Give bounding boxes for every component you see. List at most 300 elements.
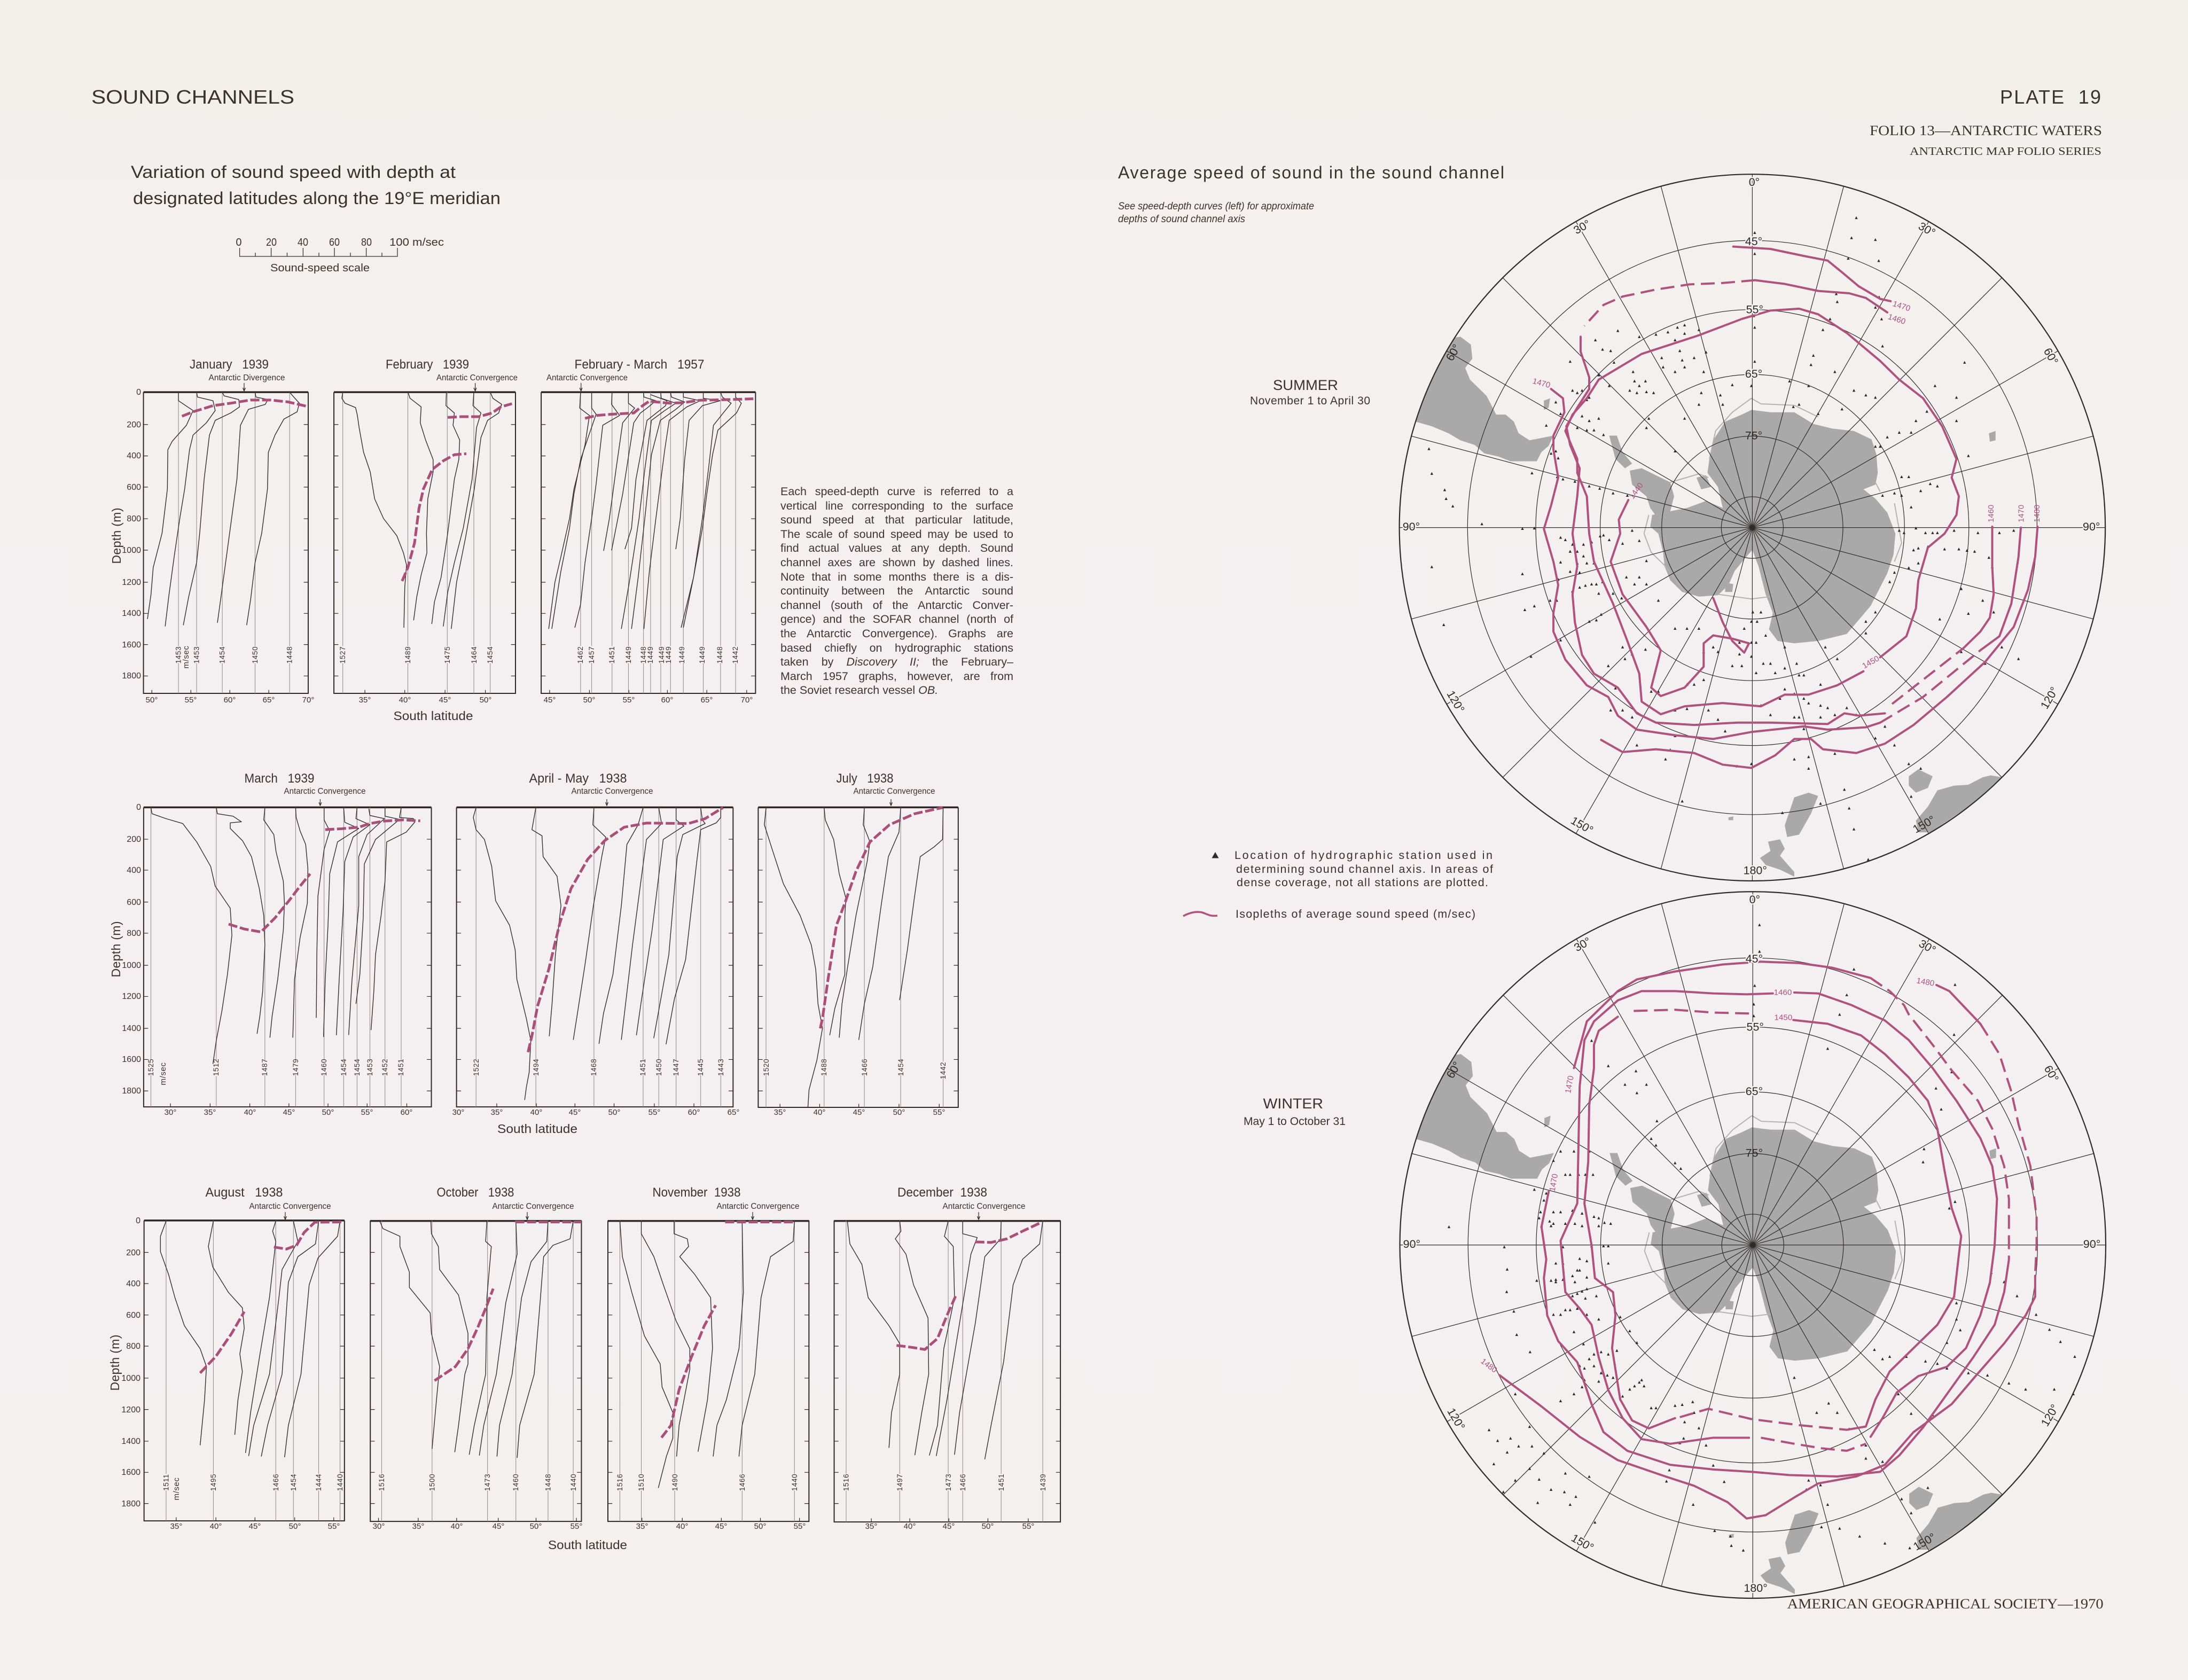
graticule labels: 30° (1917, 937, 1938, 957)
surface speed values: 1490 (671, 1474, 679, 1491)
surface speed values: 1516 (842, 1474, 850, 1491)
graticule labels: 55° (1746, 304, 1763, 316)
isopleth labels: 1440 (1627, 481, 1645, 501)
legend (1183, 849, 1493, 920)
graticule labels: 150° (1911, 814, 1937, 835)
depth axis labels, row 3: 1000 (121, 1374, 140, 1383)
depth axis labels, row 2: 1200 (122, 992, 141, 1001)
depth axis labels, row 3 (108, 1216, 140, 1509)
chart: October 1938 (370, 1185, 627, 1552)
isopleths (1499, 962, 2037, 1519)
graticule labels: 180° (1744, 865, 1767, 877)
arrow (580, 383, 582, 391)
depth axis labels, row 1: 800 (127, 514, 141, 523)
surface speed values: 1449 (665, 646, 673, 663)
surface speed values: 1454 (486, 646, 494, 663)
latitude axis labels: 40° (530, 1108, 542, 1117)
latitude axis labels: 65° (701, 696, 713, 705)
depth axis labels, row 2: 1400 (122, 1024, 141, 1033)
depth axis labels, row 3: 800 (126, 1342, 140, 1351)
latitude axis labels (373, 1522, 582, 1531)
axis title: South latitude (548, 1538, 627, 1552)
depth axis labels, row 1: 400 (127, 451, 141, 460)
left section heading (131, 162, 501, 208)
surface speed values: 1466 (861, 1059, 869, 1076)
latitude axis labels: 45° (853, 1108, 865, 1117)
surface speed values: 1445 (697, 1059, 705, 1076)
latitude axis labels: 45° (439, 696, 451, 705)
surface speed values: 1443 (717, 1059, 725, 1076)
depth axis labels, row 1: 200 (127, 420, 141, 429)
graticule labels: 65° (1746, 1085, 1763, 1098)
explanatory text block: based chiefly on hydrographic stations (780, 642, 1013, 654)
surface speed values: 1451 (397, 1059, 405, 1076)
legend: station text: Location of hydrographic station used in (1234, 849, 1492, 862)
latitude axis labels: 50° (608, 1108, 620, 1117)
graticule labels: 120° (2038, 685, 2061, 711)
graticule labels: 90° (1403, 521, 1420, 533)
surface speed values: 1473 (483, 1474, 491, 1491)
latitude axis labels: 45° (715, 1522, 727, 1531)
surface speed values: m/sec (182, 645, 191, 669)
latitude axis labels: 45° (544, 696, 556, 705)
latitude axis labels: 55° (361, 1108, 373, 1117)
depth axis labels, row 2 (109, 803, 141, 1096)
latitude axis labels: 70° (741, 696, 753, 705)
surface speed values: 1454 (897, 1059, 905, 1076)
surface speed values: 1449 (646, 646, 654, 663)
explanatory text block: channel (south of the Antarctic Conver- (780, 599, 1013, 612)
surface speed values: 1451 (997, 1474, 1005, 1491)
arrow (606, 799, 608, 806)
latitude axis labels: 55° (1022, 1522, 1034, 1531)
surface speed values: 1442 (939, 1062, 947, 1079)
legend: isopleth text: Isopleths of average sound speed (m/sec) (1236, 908, 1475, 920)
sound-speed scale: 60 (329, 237, 340, 248)
latitude axis labels (774, 1108, 945, 1117)
latitude axis labels: 35° (204, 1108, 216, 1117)
surface speed values: 1489 (404, 646, 412, 663)
series title: ANTARCTIC MAP FOLIO SERIES (1910, 145, 2101, 158)
depth axis labels, row 3: 400 (126, 1279, 140, 1288)
depth axis labels, row 2: 800 (127, 929, 141, 938)
graticule labels: 120° (1444, 1406, 1467, 1432)
legend: isopleth line (1183, 912, 1217, 916)
arrow (978, 1212, 980, 1220)
explanatory text block: continuity between the Antarctic sound (780, 584, 1013, 597)
plot (144, 1221, 345, 1521)
surface speed values: 1522 (472, 1059, 480, 1076)
explanatory text block: the Antarctic Convergence). Graphs are (780, 627, 1013, 640)
latitude axis labels (544, 696, 753, 705)
explanatory text block: the Soviet research vessel OB. (780, 684, 938, 697)
title: sound channels: SOUND CHANNELS (91, 86, 294, 108)
surface speed values: 1449 (624, 646, 632, 663)
graticule labels: 90° (2083, 1238, 2100, 1251)
note on axis depths: See speed-depth curves (left) for approximate (1118, 201, 1314, 212)
surface speed values: 1494 (532, 1059, 540, 1076)
surface speed values: 1449 (698, 646, 706, 663)
latitude axis labels: 40° (451, 1522, 463, 1531)
explanatory text block: The scale of sound speed may be used to (780, 528, 1013, 541)
chart: February-March 1957 (541, 357, 755, 705)
summer label (1250, 377, 1370, 407)
surface speed values: 1466 (959, 1474, 967, 1491)
latitude axis labels: 65° (263, 696, 275, 705)
surface speed values (472, 1059, 725, 1076)
surface speed values: 1450 (655, 1059, 663, 1076)
surface speed values: 1511 (162, 1474, 170, 1491)
legend: station text (1234, 849, 1493, 889)
surface speed values: 1440 (569, 1474, 577, 1491)
surface speed values: m/sec (159, 1062, 168, 1085)
surface speed values: 1464 (470, 646, 478, 663)
surface speed values: 1473 (944, 1474, 952, 1491)
latitude axis labels: 50° (289, 1522, 301, 1531)
graticule labels: 0° (1749, 894, 1760, 906)
chart: December 1938 (834, 1185, 1060, 1531)
graticule labels: 65° (1745, 368, 1762, 380)
graticule labels: 30° (1572, 935, 1593, 954)
latitude axis labels: 45° (493, 1522, 504, 1531)
depth axis labels, row 1: 1400 (122, 609, 141, 618)
latitude axis labels: 55° (794, 1522, 806, 1531)
surface speed values: 1442 (731, 646, 739, 663)
surface speed values: 1454 (290, 1474, 298, 1491)
graticule labels: 45° (1746, 953, 1763, 965)
station triangles (1427, 216, 2020, 861)
latitude axis labels: 50° (322, 1108, 334, 1117)
chart: February 1939 (334, 357, 518, 723)
surface speed values: 1466 (738, 1474, 746, 1491)
annotation: Antarctic Divergence: Antarctic Divergence (208, 373, 285, 382)
depth axis labels, row 2: 600 (127, 898, 141, 907)
latitude axis labels (452, 1108, 739, 1117)
chart heading: February - March 1957 (575, 357, 704, 372)
sound-speed scale: 20 (266, 237, 277, 248)
summer label: SUMMER (1273, 377, 1338, 393)
chart heading: October 1938 (437, 1185, 514, 1200)
depth axis labels, row 2: Depth (m) (109, 921, 123, 978)
folio title: FOLIO 13—ANTARCTIC WATERS (1870, 123, 2102, 138)
surface speed values: 1449 (678, 646, 686, 663)
plot (334, 392, 515, 693)
explanatory text block (780, 485, 1013, 697)
explanatory text block: March 1957 graphs, however, are from (780, 670, 1013, 683)
graticule labels: 60° (2042, 1064, 2061, 1084)
plot (608, 1221, 809, 1521)
annotation: Antarctic Convergence: Antarctic Convergence (284, 787, 365, 796)
explanatory text block: Note that in some months there is a dis- (780, 571, 1013, 583)
graticule labels: 90° (2083, 521, 2100, 533)
surface speed values (762, 1059, 947, 1079)
graticule labels: 60° (2041, 346, 2060, 367)
explanatory text block: find actual values at any depth. Sound (780, 542, 1013, 554)
arrow (751, 1212, 754, 1220)
isopleth labels: 1460 (1887, 312, 1906, 326)
latitude axis labels: 50° (893, 1108, 905, 1117)
depth axis labels, row 3: 1800 (121, 1499, 140, 1509)
annotation: Antarctic Convergence: Antarctic Convergence (436, 373, 518, 382)
explanatory text block: sound speed at that particular latitude, (780, 513, 1013, 526)
isopleth labels: 1450 (1861, 654, 1881, 670)
depth axis labels, row 3: 200 (126, 1248, 140, 1257)
surface speed values: 1451 (639, 1059, 647, 1076)
chart: November 1938 (608, 1185, 809, 1531)
map: summer (1400, 174, 2105, 881)
legend: station text: dense coverage, not all stations are plotted. (1237, 876, 1488, 889)
latitude axis labels: 50° (480, 696, 491, 705)
plot (370, 1221, 581, 1521)
depth axis labels, row 2: 200 (127, 835, 141, 844)
graticule labels: 150° (1568, 815, 1595, 837)
chart: July 1938 (758, 771, 958, 1117)
graticule labels: 0° (1749, 176, 1760, 189)
note on axis depths (1118, 201, 1314, 225)
annotation: Antarctic Convergence: Antarctic Convergence (546, 373, 628, 382)
winter label: WINTER (1263, 1096, 1323, 1112)
surface speed values (842, 1474, 1047, 1491)
latitude axis labels: 45° (283, 1108, 295, 1117)
plate number: PLATE 19 (2000, 86, 2101, 108)
surface speed values: 1468 (590, 1059, 598, 1076)
sound-speed scale (236, 237, 444, 274)
surface speed values: 1475 (443, 646, 451, 663)
latitude axis labels: 50° (146, 696, 158, 705)
surface speed values: 1453 (192, 646, 201, 663)
map: winter (1400, 892, 2106, 1598)
depth axis labels, row 3: Depth (m) (108, 1334, 122, 1391)
explanatory text block: taken by Discovery II; the February– (780, 655, 1013, 668)
annotation: Antarctic Convergence: Antarctic Convergence (942, 1202, 1026, 1211)
surface speed values: 1449 (658, 646, 666, 663)
latitude axis labels (636, 1522, 806, 1531)
latitude axis labels: 45° (249, 1522, 261, 1531)
surface speed values (616, 1474, 799, 1491)
chart heading: July 1938 (837, 771, 893, 786)
explanatory text block: Each speed-depth curve is referred to a (780, 485, 1013, 498)
surface speed values: 1450 (251, 646, 259, 663)
surface speed values: 1448 (716, 646, 724, 663)
surface speed values (339, 646, 494, 663)
surface speed values: 1497 (896, 1474, 904, 1491)
latitude axis labels: 55° (623, 696, 635, 705)
latitude axis labels: 30° (165, 1108, 176, 1117)
latitude axis labels: 60° (688, 1108, 700, 1117)
surface speed values: 1453 (175, 646, 183, 663)
depth axis labels, row 1: 600 (127, 483, 141, 492)
plot (457, 807, 733, 1107)
latitude axis labels: 55° (933, 1108, 945, 1117)
latitude axis labels: 30° (452, 1108, 464, 1117)
surface speed values: m/sec (172, 1477, 181, 1501)
surface speed values: 1447 (672, 1059, 680, 1076)
latitude axis labels: 35° (774, 1108, 786, 1117)
latitude axis labels: 35° (636, 1522, 648, 1531)
graticule labels: 30° (1572, 218, 1593, 237)
chart heading: February 1939 (386, 357, 469, 372)
explanatory text block: vertical line corresponding to the surface (780, 499, 1013, 512)
publisher credit: AMERICAN GEOGRAPHICAL SOCIETY—1970 (1787, 1596, 2104, 1612)
station triangles (1448, 924, 2076, 1552)
surface speed values: 1444 (315, 1474, 323, 1491)
surface speed values: 1466 (272, 1474, 280, 1491)
graticule labels (1403, 894, 2100, 1595)
latitude axis labels: 60° (661, 696, 673, 705)
surface speed values: 1512 (212, 1059, 220, 1076)
depth axis labels, row 2: 1600 (122, 1055, 141, 1064)
surface speed values: 1510 (637, 1474, 645, 1491)
latitude axis labels: 40° (210, 1522, 222, 1531)
arrow (243, 383, 246, 391)
isopleth labels: 1470 (1548, 1173, 1560, 1192)
isopleth labels: 1470 (1531, 377, 1551, 390)
arrow (474, 383, 476, 391)
depth axis labels, row 2: 1000 (122, 961, 141, 970)
depth axis labels, row 3: 1200 (121, 1405, 140, 1415)
graticule labels: 150° (1911, 1531, 1938, 1553)
chart heading: April - May 1938 (529, 771, 627, 786)
latitude axis labels: 60° (401, 1108, 412, 1117)
latitude axis labels (146, 696, 314, 705)
surface speed values: 1527 (339, 646, 347, 663)
depth axis labels, row 1: 1600 (122, 640, 141, 650)
surface speed values: 1453 (366, 1059, 374, 1076)
surface speed values (378, 1474, 577, 1491)
surface speed values (576, 646, 739, 663)
surface speed values (175, 645, 294, 669)
annotation: Antarctic Convergence: Antarctic Convergence (572, 787, 653, 796)
sound-speed scale: 100 m/sec (389, 237, 444, 248)
surface speed values (147, 1059, 405, 1085)
chart heading: January 1939 (190, 357, 269, 372)
latitude axis labels: 35° (359, 696, 371, 705)
winter label (1244, 1096, 1346, 1128)
surface speed values: 1495 (209, 1474, 217, 1491)
surface speed values: 1448 (544, 1474, 552, 1491)
surface speed values: 1454 (353, 1059, 361, 1076)
surface speed values: 1488 (820, 1059, 828, 1076)
surface speed values: 1439 (1039, 1474, 1047, 1491)
chart heading: November 1938 (653, 1185, 740, 1200)
graticule labels: 75° (1745, 430, 1762, 442)
chart: April-May 1938 (452, 771, 739, 1136)
left section heading: Variation of sound speed with depth at (131, 162, 456, 182)
surface speed values: 1520 (762, 1059, 770, 1076)
surface speed values: 1460 (320, 1059, 328, 1076)
chart: August 1938 (144, 1185, 345, 1531)
surface speed values: 1440 (791, 1474, 799, 1491)
latitude axis labels: 40° (904, 1522, 916, 1531)
summer label: November 1 to April 30 (1250, 395, 1370, 407)
chart: January 1939 (144, 357, 314, 705)
latitude axis labels: 35° (491, 1108, 503, 1117)
annotation: Antarctic Convergence: Antarctic Convergence (717, 1202, 799, 1211)
plot (758, 807, 958, 1107)
latitude axis labels: 30° (373, 1522, 385, 1531)
latitude axis labels: 40° (814, 1108, 825, 1117)
isopleth labels: 1470 (2017, 505, 2026, 522)
latitude axis labels: 35° (412, 1522, 424, 1531)
surface speed values (162, 1474, 344, 1501)
latitude axis labels: 35° (170, 1522, 182, 1531)
arrow (319, 799, 322, 806)
graticule labels (1403, 176, 2100, 877)
graticule labels: 60° (1444, 1060, 1464, 1081)
surface speed values: 1479 (292, 1059, 300, 1076)
latitude axis labels (359, 696, 491, 705)
graticule labels: 60° (1444, 342, 1463, 363)
graticule labels: 180° (1744, 1582, 1768, 1595)
arrow (890, 799, 892, 806)
annotation: Antarctic Convergence: Antarctic Convergence (249, 1202, 331, 1211)
isopleth labels: 1480 (1916, 976, 1935, 988)
sound-speed scale: 0 (236, 237, 241, 248)
axis title: South latitude (393, 709, 473, 723)
latitude axis labels: 55° (185, 696, 197, 705)
arrow (284, 1212, 286, 1220)
graticule labels: 120° (2039, 1402, 2061, 1428)
surface speed values: 1462 (576, 646, 584, 663)
latitude axis labels (865, 1522, 1034, 1531)
plot (144, 392, 308, 693)
plot (541, 392, 755, 693)
surface speed values: 1516 (616, 1474, 624, 1491)
depth axis labels, row 3: 1600 (121, 1468, 140, 1477)
latitude axis labels: 55° (328, 1522, 340, 1531)
latitude axis labels: 55° (571, 1522, 582, 1531)
annotation: Antarctic Convergence: Antarctic Convergence (493, 1202, 574, 1211)
depth axis labels, row 1: 1800 (122, 671, 141, 681)
right section heading: Average speed of sound in the sound channel (1118, 163, 1504, 182)
graticule labels: 75° (1746, 1147, 1763, 1159)
surface speed values: 1440 (336, 1474, 344, 1491)
chart: March 1939 (144, 771, 432, 1117)
explanatory text block: channel axes are shown by dashed lines. (780, 556, 1013, 569)
depth axis labels, row 3: 600 (126, 1311, 140, 1320)
left section heading: designated latitudes along the 19°E meridian (133, 189, 501, 208)
depth axis labels, row 2: 1800 (122, 1087, 141, 1096)
surface speed values: 1448 (639, 646, 647, 663)
depth axis labels, row 2: 400 (127, 866, 141, 875)
latitude axis labels: 45° (569, 1108, 581, 1117)
depth axis labels, row 3: 1400 (121, 1437, 140, 1446)
latitude axis labels: 50° (583, 696, 595, 705)
latitude axis labels: 50° (754, 1522, 766, 1531)
isopleth labels: 1460 (1987, 505, 1996, 522)
graticule labels: 55° (1747, 1021, 1764, 1034)
chart heading: March 1939 (245, 771, 314, 786)
plot (834, 1221, 1060, 1522)
sound-speed scale: 40 (298, 237, 308, 248)
chart heading: August 1938 (205, 1185, 283, 1200)
isopleth labels: 1480 (1479, 1357, 1499, 1374)
surface speed values: 1500 (428, 1474, 436, 1491)
latitude axis labels: 50° (530, 1522, 542, 1531)
isopleth labels (1479, 976, 1935, 1374)
latitude axis labels: 40° (399, 696, 411, 705)
surface speed values: 1448 (286, 646, 294, 663)
surface speed values: 1454 (218, 646, 226, 663)
graticule labels: 90° (1403, 1238, 1420, 1251)
depth axis labels, row 3: 0 (136, 1216, 140, 1225)
depth axis labels, row 1: 1000 (122, 546, 141, 555)
surface speed values: 1451 (608, 646, 616, 663)
surface speed values: 1525 (147, 1059, 155, 1076)
depth axis labels, row 1: 1200 (122, 578, 141, 587)
axis title: South latitude (497, 1122, 577, 1136)
depth axis labels, row 1: Depth (m) (110, 507, 123, 564)
